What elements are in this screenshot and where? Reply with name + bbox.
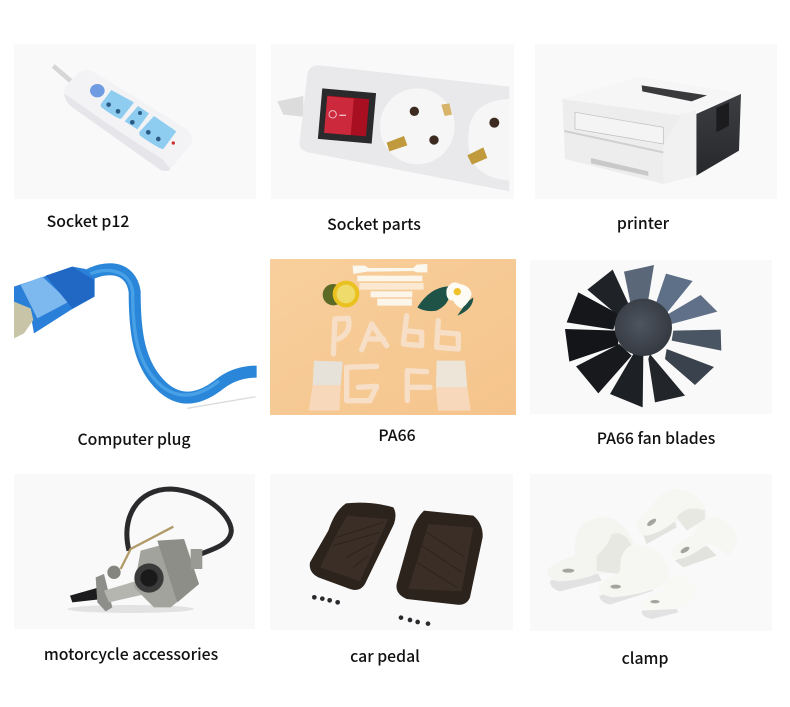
panel: clamp <box>530 474 772 631</box>
label: Computer plug: Computer plug <box>77 427 191 450</box>
panel: printer <box>535 44 777 199</box>
label: motorcycle accessories: motorcycle accessories <box>44 642 218 665</box>
panel: PA66 photo <box>270 259 516 415</box>
panel: computer plug <box>14 267 257 408</box>
label: Socket parts: Socket parts <box>327 212 421 235</box>
panel: fan blades <box>530 260 772 414</box>
label: printer: printer <box>617 211 669 234</box>
label: clamp: clamp <box>622 646 668 669</box>
label: Socket p12: Socket p12 <box>47 209 129 232</box>
label: car pedal: car pedal <box>350 644 420 667</box>
label: PA66: PA66 <box>378 423 416 446</box>
panel: socket parts <box>271 44 514 199</box>
label: PA66 fan blades: PA66 fan blades <box>597 426 715 449</box>
panel: motorcycle accessories <box>14 474 255 629</box>
panel: car pedal <box>270 474 513 630</box>
panel: socket p12 <box>14 44 256 199</box>
